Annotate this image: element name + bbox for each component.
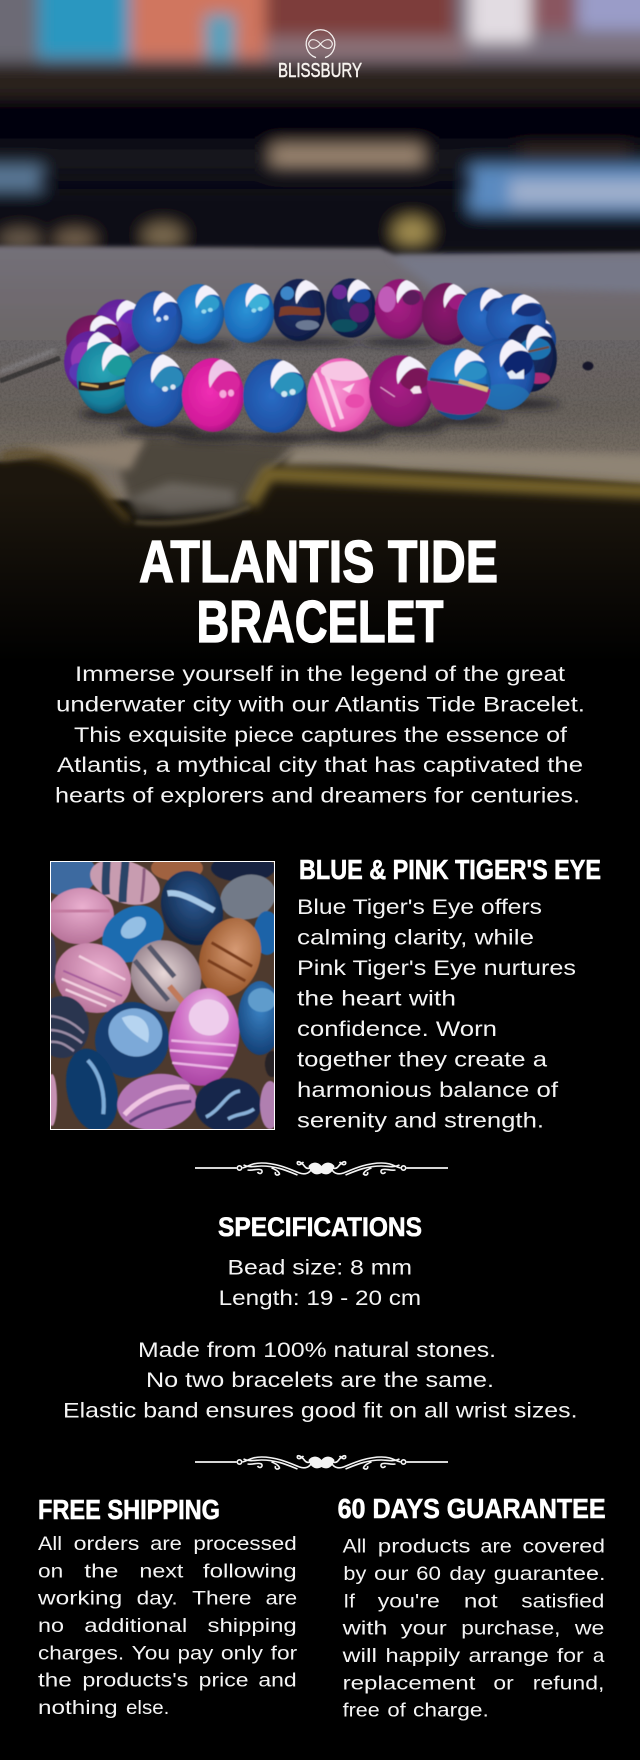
stones description: [297, 895, 576, 1132]
guarantee text: of: [387, 1700, 406, 1722]
intro paragraph: Atlantis, a mythical city that has captivated the: [57, 753, 583, 777]
bead: sky blue: [224, 283, 274, 343]
guarantee text: guarantee.: [494, 1563, 606, 1585]
free shipping text: orders: [74, 1533, 140, 1555]
free shipping text: working: [37, 1588, 122, 1610]
bead: blue: [174, 284, 224, 344]
free shipping text: [37, 1533, 298, 1719]
bead: deep blue: [124, 353, 186, 427]
brand name: BLISSBURY: [278, 60, 362, 82]
guarantee text: [341, 1536, 606, 1722]
ornamental divider: [195, 1162, 448, 1175]
bead: magenta: [369, 355, 433, 427]
free shipping text: following: [203, 1560, 297, 1582]
intro paragraph: This exquisite piece captures the essence of: [74, 723, 567, 747]
free shipping text: additional: [84, 1615, 187, 1637]
bead: blue and magenta with gold: [426, 348, 492, 423]
specifications list: [63, 1256, 578, 1422]
guarantee text: free: [343, 1700, 380, 1722]
front beads: [77, 338, 535, 433]
bead: blue: [243, 359, 307, 433]
stone surface: [0, 246, 640, 500]
free shipping text: products's: [82, 1670, 189, 1692]
guarantee text: products: [378, 1536, 471, 1558]
title: ATLANTIS TIDE: [139, 529, 498, 595]
free shipping text: else.: [126, 1697, 169, 1719]
specifications list: No two bracelets are the same.: [146, 1368, 494, 1392]
bead: lower right small: [544, 319, 557, 346]
stones description: confidence. Worn: [297, 1017, 497, 1041]
heading: guarantee: 60 DAYS GUARANTEE: [338, 1493, 606, 1524]
icon: infinity circle: [306, 30, 335, 58]
bead shadows: [79, 338, 560, 443]
pebble: slim navy: [66, 1048, 118, 1129]
guarantee text: not: [464, 1590, 498, 1612]
free shipping text: processed: [193, 1533, 297, 1555]
free shipping text: the: [38, 1670, 72, 1692]
bead: cobalt: [473, 338, 535, 411]
guarantee text: covered: [522, 1536, 605, 1558]
guarantee text: day: [449, 1563, 486, 1585]
stones description: Blue Tiger's Eye offers: [297, 895, 542, 919]
title: [139, 529, 498, 655]
free shipping text: charges.: [38, 1642, 124, 1664]
free shipping text: and: [258, 1670, 297, 1692]
intro paragraph: underwater city with our Atlantis Tide Bracelet.: [56, 692, 585, 716]
heading: free shipping: FREE SHIPPING: [38, 1494, 220, 1525]
guarantee text: satisfied: [521, 1590, 604, 1612]
title: BRACELET: [196, 589, 444, 655]
free shipping text: are: [266, 1588, 297, 1610]
pebble: mixed: [130, 939, 202, 1012]
stones description: calming clarity, while: [297, 926, 534, 950]
guarantee text: 60: [416, 1563, 441, 1585]
bead: magenta purple: [375, 279, 425, 339]
guarantee text: happily: [386, 1645, 460, 1667]
pebble: blue right: [238, 980, 274, 1056]
stones photo: [50, 861, 275, 1130]
specifications list: Bead size: 8 mm: [228, 1256, 412, 1280]
bracelet: [64, 278, 560, 443]
ornamental divider: [195, 1456, 448, 1469]
stones description: harmonious balance of: [297, 1078, 558, 1102]
logo: [278, 30, 362, 82]
free shipping text: are: [150, 1533, 182, 1555]
bead: royal blue: [457, 287, 511, 347]
bead: dark teal right: [503, 324, 557, 392]
guarantee text: charge.: [413, 1700, 489, 1722]
pebble: pink left: [51, 887, 115, 945]
specifications list: Length: 19 - 20 cm: [219, 1286, 421, 1310]
stones description: the heart with: [297, 987, 456, 1011]
bead: violet left: [96, 298, 140, 354]
guarantee text: by: [343, 1563, 367, 1585]
free shipping text: next: [139, 1560, 184, 1582]
bead: hot pink: [182, 358, 244, 432]
stones description: together they create a: [297, 1048, 547, 1072]
stone chip: [582, 362, 594, 370]
pebble: top row: [51, 862, 95, 896]
free shipping text: You: [132, 1642, 170, 1664]
pebble: blue glossy: [102, 904, 164, 964]
guarantee text: will: [341, 1645, 377, 1667]
heading: specifications: SPECIFICATIONS: [218, 1212, 422, 1242]
bead: dark purple swirl: [326, 278, 376, 338]
intro paragraph: [55, 662, 585, 807]
intro paragraph: hearts of explorers and dreamers for centuries.: [55, 783, 580, 807]
bead: violet far left: [66, 314, 122, 348]
free shipping text: There: [192, 1588, 252, 1610]
free shipping text: shipping: [208, 1615, 297, 1637]
bead: plum: [422, 283, 472, 345]
pebble: pink purple bands: [116, 1073, 198, 1129]
free shipping text: for: [271, 1642, 298, 1664]
guarantee text: All: [343, 1536, 366, 1558]
bead: lilac: [64, 330, 114, 390]
bead: blue left: [132, 291, 182, 353]
pebble: dark bottom: [195, 1078, 261, 1132]
rock ledge fading to black: [0, 438, 640, 730]
back beads: [64, 278, 557, 393]
guarantee text: with: [341, 1618, 387, 1640]
pebble: orange: [198, 917, 262, 997]
free shipping text: on: [38, 1560, 63, 1582]
free shipping text: All: [38, 1533, 62, 1555]
specifications list: Elastic band ensures good fit on all wrist sizes.: [63, 1398, 578, 1422]
pebble: dark blue: [160, 870, 224, 946]
guarantee text: arrange: [468, 1645, 549, 1667]
guarantee text: or: [493, 1672, 514, 1694]
free shipping text: pay: [178, 1642, 214, 1664]
free shipping text: day.: [137, 1588, 178, 1610]
free shipping text: nothing: [38, 1697, 118, 1719]
intro paragraph: Immerse yourself in the legend of the great: [75, 662, 565, 686]
free shipping text: only: [221, 1642, 263, 1664]
bead: dark with brown: [273, 279, 325, 341]
pebble: pink striped: [54, 942, 132, 1014]
guarantee text: If: [343, 1590, 356, 1612]
free shipping text: no: [38, 1615, 64, 1637]
bead: teal with gold vein: [77, 342, 135, 414]
hero photo background: blurred street scene: [0, 0, 640, 300]
bead: light pink agate: [307, 358, 373, 432]
guarantee text: replacement: [343, 1672, 476, 1694]
guarantee text: refund,: [533, 1672, 604, 1694]
free shipping text: the: [84, 1560, 118, 1582]
guarantee text: you're: [378, 1590, 440, 1612]
guarantee text: our: [374, 1563, 409, 1585]
pebble: large blue: [94, 1002, 170, 1078]
guarantee text: a: [593, 1645, 605, 1667]
guarantee text: we: [574, 1618, 604, 1640]
specifications list: Made from 100% natural stones.: [138, 1338, 496, 1362]
guarantee text: are: [480, 1536, 512, 1558]
bead: upper right: [486, 292, 547, 332]
stones description: serenity and strength.: [297, 1108, 544, 1132]
guarantee text: your: [401, 1618, 447, 1640]
guarantee text: for: [557, 1645, 584, 1667]
pebble: magenta banded: [168, 987, 240, 1087]
guarantee text: purchase,: [461, 1618, 560, 1640]
pebble: striped dark left: [51, 996, 90, 1058]
stones description: Pink Tiger's Eye nurtures: [297, 956, 576, 980]
free shipping text: price: [199, 1670, 248, 1692]
